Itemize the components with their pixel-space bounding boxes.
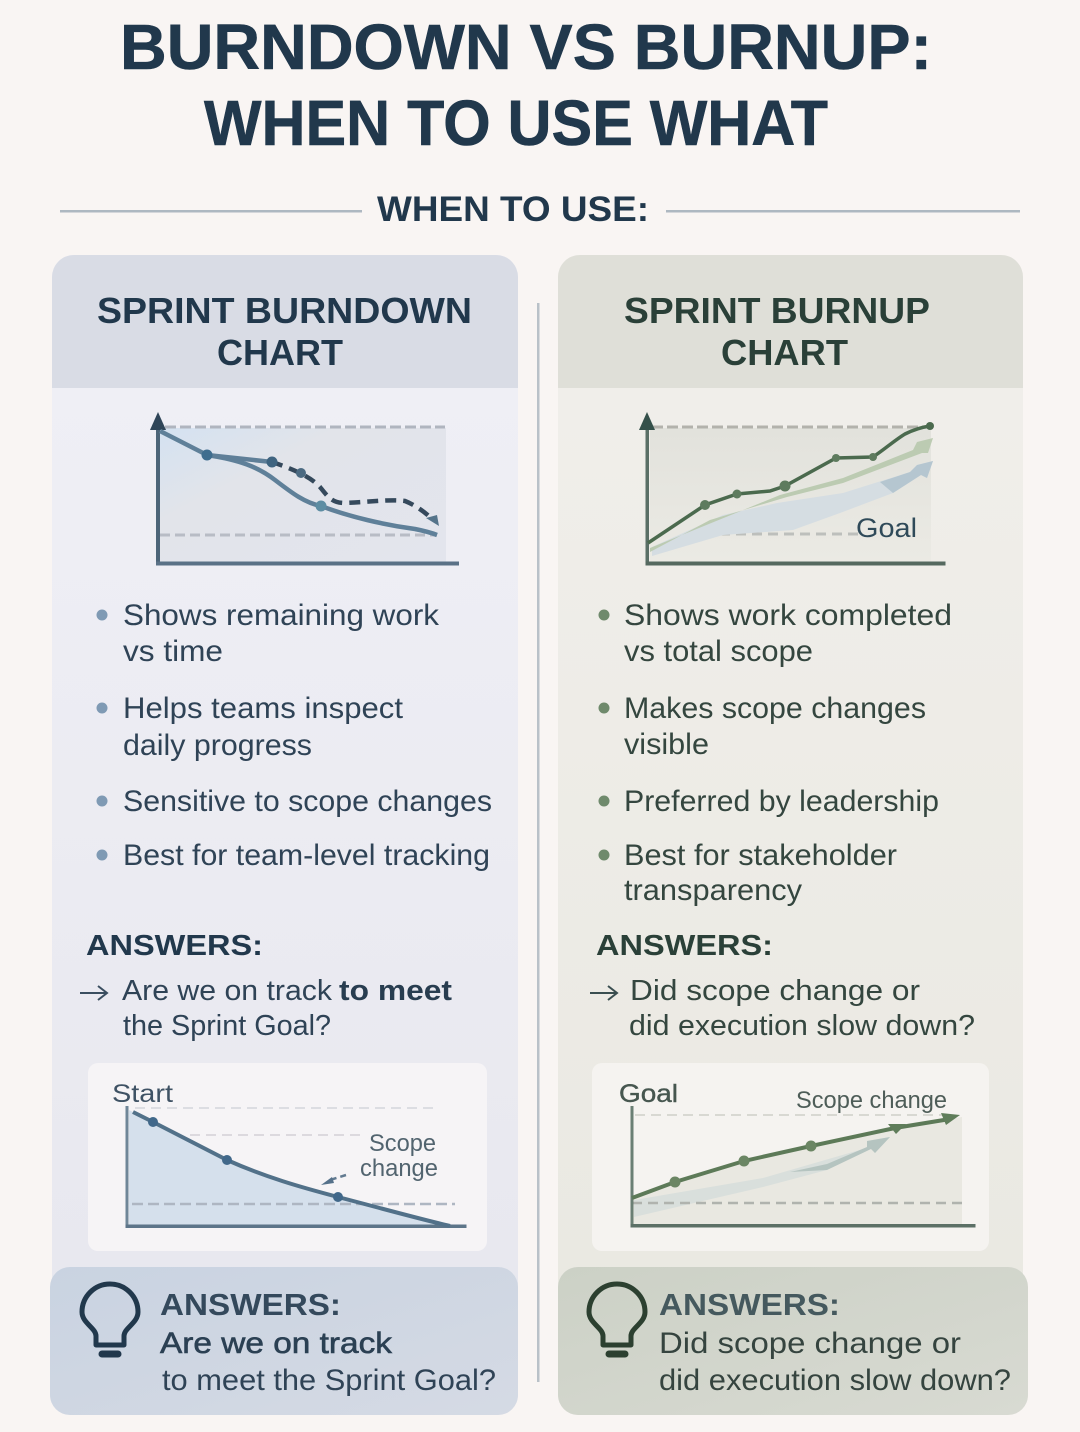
bullet list: burnup: visible	[624, 728, 709, 761]
bullet list: burnup: vs total scope	[624, 635, 813, 668]
answer box: burnup: ANSWERS:	[659, 1287, 840, 1322]
bullet list: burnup: Best for stakeholder	[624, 839, 897, 872]
burndown line chart	[150, 412, 459, 566]
mini chart card: burnup goal: Goal	[619, 1080, 678, 1108]
answer box: burndown: to meet the Sprint Goal?	[162, 1364, 496, 1397]
icon: lightbulb	[589, 1284, 645, 1354]
bullet list: burndown: vs time	[123, 635, 223, 668]
answers: burndown question: Are we on track	[122, 975, 333, 1007]
icon: lightbulb	[82, 1284, 138, 1354]
title: BURNDOWN VS BURNUP:	[120, 11, 932, 83]
panel header: sprint burndown	[52, 255, 518, 388]
center divider	[537, 303, 540, 1382]
title	[120, 11, 932, 159]
bullet list: burnup: Makes scope changes	[624, 692, 926, 725]
panel header: sprint burnup	[558, 255, 1023, 388]
bullet list: burndown: Helps teams inspect	[123, 692, 404, 725]
answer box: burndown	[50, 1267, 518, 1415]
answer box: burndown: Are we on track	[160, 1327, 393, 1360]
panel header: sprint burnup: SPRINT BURNUP	[624, 290, 930, 331]
answers: burndown question: ANSWERS:	[86, 930, 263, 962]
bullet list: burndown: Best for team-level tracking	[123, 839, 490, 872]
panel: sprint burnup chart	[558, 255, 1028, 1415]
section heading: when to use: WHEN TO USE:	[377, 190, 649, 229]
mini chart card: burndown start: Scope	[369, 1130, 436, 1157]
burnup line chart: Goal	[856, 513, 917, 543]
panel: sprint burndown chart	[50, 255, 518, 1415]
burnup line chart	[639, 412, 946, 566]
answer box: burndown: ANSWERS:	[160, 1287, 341, 1322]
bullet list: burndown	[96, 599, 492, 872]
title: WHEN TO USE WHAT	[204, 87, 828, 159]
mini chart card: burnup goal: Scope change	[796, 1087, 947, 1114]
bullet list: burndown: Sensitive to scope changes	[123, 785, 492, 818]
bullet list: burnup	[598, 599, 952, 907]
mini chart card: burnup goal	[592, 1063, 989, 1251]
answers: burndown question: the Sprint Goal?	[123, 1010, 331, 1042]
answers: burnup question	[590, 930, 975, 1042]
answers: burnup question: Did scope change or	[630, 975, 920, 1007]
bullet list: burnup: Shows work completed	[624, 599, 952, 632]
mini chart card: burndown start: Start	[112, 1080, 173, 1108]
answer box: burnup: did execution slow down?	[659, 1364, 1011, 1397]
bullet list: burndown: Shows remaining work	[123, 599, 440, 632]
answer box: burnup: Did scope change or	[659, 1327, 961, 1360]
mini chart card: burndown start: change	[360, 1155, 438, 1182]
answer box: burnup	[558, 1267, 1028, 1415]
panel header: sprint burndown: SPRINT BURNDOWN	[97, 290, 472, 331]
answers: burnup question: ANSWERS:	[596, 930, 773, 962]
bullet list: burnup: transparency	[624, 874, 802, 907]
mini chart card: burndown start	[88, 1063, 487, 1251]
answers: burndown question: to meet	[339, 975, 452, 1007]
answers: burndown question	[80, 930, 452, 1042]
panel header: sprint burnup: CHART	[721, 332, 848, 373]
answers: burnup question: did execution slow down?	[629, 1010, 975, 1042]
panel header: sprint burndown: CHART	[217, 332, 343, 373]
bullet list: burnup: Preferred by leadership	[624, 785, 939, 818]
bullet list: burndown: daily progress	[123, 729, 312, 762]
